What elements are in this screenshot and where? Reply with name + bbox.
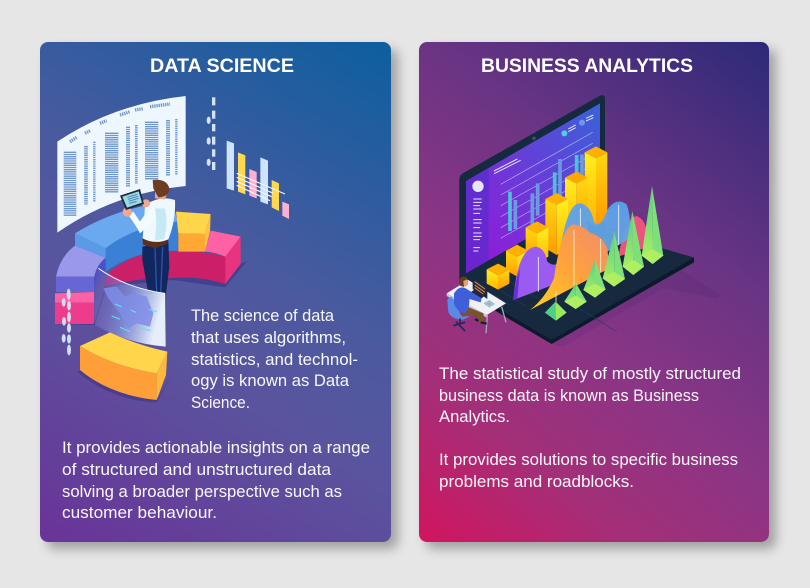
cast shadow (552, 267, 720, 347)
ring segment: crimson (103, 231, 241, 287)
title: business analytics: BUSINESS ANALYTICS (481, 55, 693, 77)
text: data science definition: Science. (191, 394, 250, 412)
ring segment: yellow (176, 212, 211, 252)
floating dots (207, 97, 215, 170)
area chart: red (618, 216, 647, 257)
gold bars (487, 146, 607, 290)
text: data science definition: ogy is known as Data (191, 372, 350, 390)
ring segment: orange bottom (77, 332, 172, 403)
illustration: data science isometric scene (52, 96, 289, 403)
text: data science definition: The science of data (191, 307, 335, 325)
text: data science details: solving a broader perspective such as (62, 483, 342, 501)
person at desk (447, 277, 506, 333)
text: business analytics definition: The statistical study of mostly structured (439, 365, 741, 383)
area chart: purple (513, 247, 562, 300)
text: business analytics definition: Analytics. (439, 408, 510, 426)
pyramids (545, 186, 663, 321)
text: data science details: customer behaviour. (62, 504, 217, 522)
panel: business analytics card background (419, 42, 769, 542)
floating ellipses (62, 289, 71, 355)
area chart: blue (562, 202, 630, 262)
person with tablet (120, 180, 175, 293)
ring segment: blue (75, 204, 178, 272)
text: data science definition (191, 307, 358, 412)
text: business analytics details: problems and roadblocks. (439, 473, 634, 491)
area chart: orange (530, 224, 609, 310)
laptop screen (459, 95, 605, 282)
text: data science definition: statistics, and technol- (191, 351, 358, 369)
text: business analytics definition (439, 365, 741, 426)
illustration: business analytics laptop scene (447, 95, 720, 347)
ring shadow (52, 262, 247, 325)
title: data science: DATA SCIENCE (150, 55, 294, 77)
laptop base (459, 232, 694, 344)
data sheet (57, 96, 186, 233)
text: data science definition: that uses algorithms, (191, 329, 346, 347)
text: data science details: It provides actionable insights on a range (62, 439, 370, 457)
text: business analytics definition: business data is known as Business (439, 387, 699, 405)
floating bar chart (227, 141, 289, 219)
text: data science details: of structured and unstructured data (62, 461, 332, 479)
ring segment: pink left (55, 292, 94, 324)
ring segment: purple (56, 246, 106, 292)
text: business analytics details (439, 451, 738, 491)
panel: data science card background (40, 42, 391, 542)
glass world map screen (94, 268, 166, 347)
text: business analytics details: It provides solutions to specific business (439, 451, 738, 469)
text: data science details (62, 439, 370, 522)
